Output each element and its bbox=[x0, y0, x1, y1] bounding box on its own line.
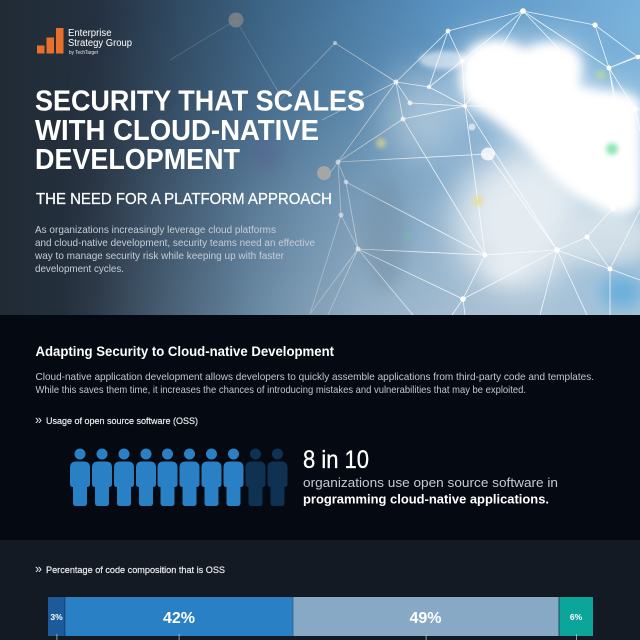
logo: Enterprise Strategy Group: by TechTarget bbox=[69, 50, 99, 56]
title: SECURITY THAT SCALES bbox=[35, 86, 365, 118]
network lines bbox=[170, 11, 640, 315]
logo: Enterprise Strategy Group: Strategy Group bbox=[68, 38, 132, 49]
panel: adapting security bbox=[0, 315, 640, 540]
section paragraph: While this saves them time, it increases the chances of introducing mistakes and vulnerabilities that may be exploited. bbox=[36, 384, 526, 396]
intro paragraph: way to manage security risk while keeping up with faster bbox=[34, 250, 284, 262]
subheading: percentage of code bbox=[35, 562, 225, 576]
stacked bar chart: 6% bbox=[570, 612, 583, 622]
subheading: percentage of code: » bbox=[35, 562, 42, 576]
section paragraph bbox=[36, 371, 594, 396]
stacked bar chart: 42% bbox=[163, 610, 195, 627]
stacked bar chart: 3% bbox=[50, 612, 63, 622]
pictogram: 8 of 10 people bbox=[70, 448, 288, 506]
stat description bbox=[303, 475, 558, 506]
stacked bar chart: 49% bbox=[409, 610, 442, 627]
stat description: programming cloud-native applications. bbox=[303, 492, 549, 506]
subtitle: THE NEED FOR A PLATFORM APPROACH bbox=[36, 191, 332, 208]
logo: Enterprise Strategy Group bbox=[37, 28, 132, 56]
section heading: Adapting Security to Cloud-native Development bbox=[36, 344, 334, 359]
panel: hero background with cloud and network bbox=[0, 0, 640, 323]
network nodes bbox=[333, 8, 640, 302]
title: WITH CLOUD-NATIVE bbox=[35, 115, 319, 147]
stacked bar chart bbox=[48, 596, 593, 640]
intro paragraph: development cycles. bbox=[35, 263, 124, 275]
section paragraph: Cloud-native application development allows developers to quickly assemble applications from third-party code and templates. bbox=[36, 371, 594, 383]
logo: Enterprise Strategy Group: Enterprise bbox=[68, 28, 112, 39]
subheading: usage of OSS: Usage of open source software (OSS) bbox=[46, 416, 198, 426]
title: DEVELOPMENT bbox=[35, 144, 240, 176]
title bbox=[35, 86, 365, 176]
intro paragraph: As organizations increasingly leverage cloud platforms bbox=[35, 224, 276, 236]
subheading: usage of OSS: » bbox=[35, 413, 42, 427]
subheading: percentage of code: Percentage of code composition that is OSS bbox=[46, 565, 225, 575]
stat: 8 in 10: 8 in 10 bbox=[303, 446, 369, 474]
subheading: usage of OSS bbox=[35, 413, 198, 427]
intro paragraph: and cloud-native development, security teams need an effective bbox=[35, 237, 315, 249]
intro paragraph bbox=[34, 224, 315, 275]
panel: code composition bbox=[0, 540, 640, 640]
stat description: organizations use open source software in bbox=[303, 475, 558, 490]
